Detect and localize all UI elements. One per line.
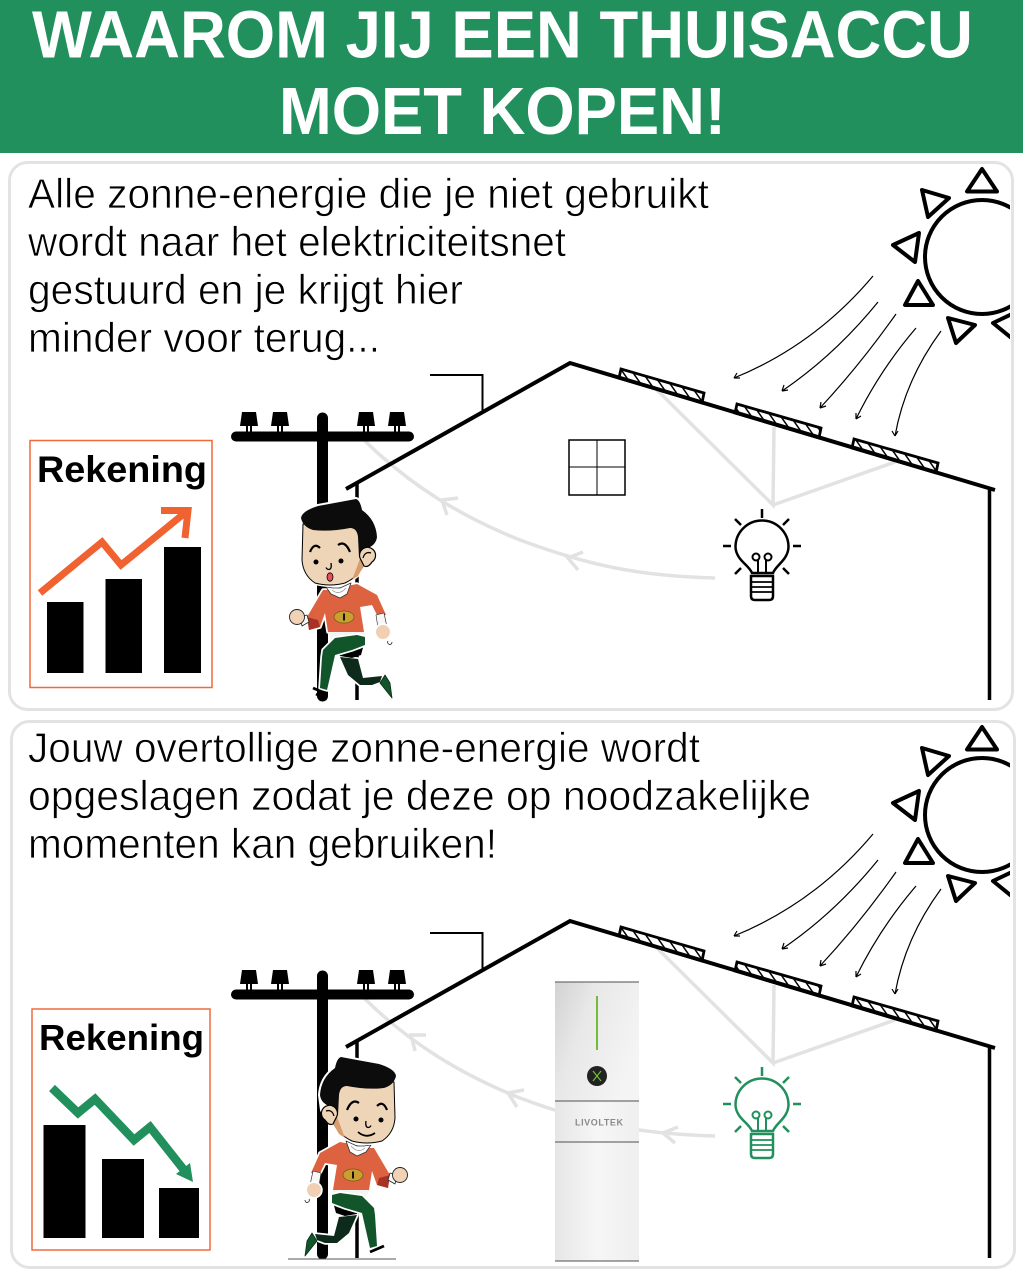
- text block: problem explanation: minder voor terug...: [28, 314, 380, 361]
- text block: problem explanation: Alle zonne-energie die je niet gebruikt: [28, 170, 709, 217]
- text block: problem explanation: [27, 170, 709, 361]
- bill chart: rising costs: Rekening: [37, 448, 207, 490]
- text block: solution explanation: opgeslagen zodat je deze op noodzakelijke: [28, 772, 811, 819]
- text block: solution explanation: [28, 724, 811, 867]
- character: surprised running man: [290, 499, 392, 699]
- solar panels: [619, 369, 938, 473]
- ground line: [288, 1258, 396, 1260]
- text block: problem explanation: wordt naar het elektriciteitsnet: [27, 218, 566, 265]
- bill chart: falling costs: Rekening: [39, 1017, 204, 1058]
- energy flow lines: [365, 390, 895, 578]
- text block: solution explanation: momenten kan gebruiken!: [28, 820, 497, 867]
- utility pole: [236, 970, 409, 1254]
- title banner: [0, 0, 1023, 153]
- text block: solution explanation: Jouw overtollige zonne-energie wordt: [28, 724, 700, 771]
- bill chart: rising costs: [30, 440, 212, 688]
- home battery: Livoltek: [555, 982, 639, 1261]
- icon: sun with rays: [893, 727, 1024, 901]
- icon: sun with rays: [893, 169, 1024, 343]
- title banner: MOET KOPEN!: [279, 74, 726, 149]
- panel: with battery: [12, 722, 1024, 1268]
- character: happy running man: [305, 1057, 408, 1256]
- icon: light bulb: [723, 509, 801, 600]
- home battery: Livoltek: LIVOLTEK: [575, 1118, 624, 1128]
- window: [569, 440, 625, 495]
- icon: green light bulb: [723, 1067, 801, 1158]
- utility pole: [236, 412, 409, 696]
- sunlight arrows: [734, 834, 941, 994]
- solar panels: [619, 927, 938, 1031]
- sunlight arrows: [734, 276, 941, 436]
- bill chart: falling costs: [32, 1009, 210, 1250]
- text block: problem explanation: gestuurd en je krijgt hier: [28, 266, 463, 313]
- house outline: [346, 363, 995, 700]
- energy flow lines: [365, 948, 895, 1143]
- panel: without battery: [10, 162, 1024, 710]
- house outline: [346, 921, 995, 1258]
